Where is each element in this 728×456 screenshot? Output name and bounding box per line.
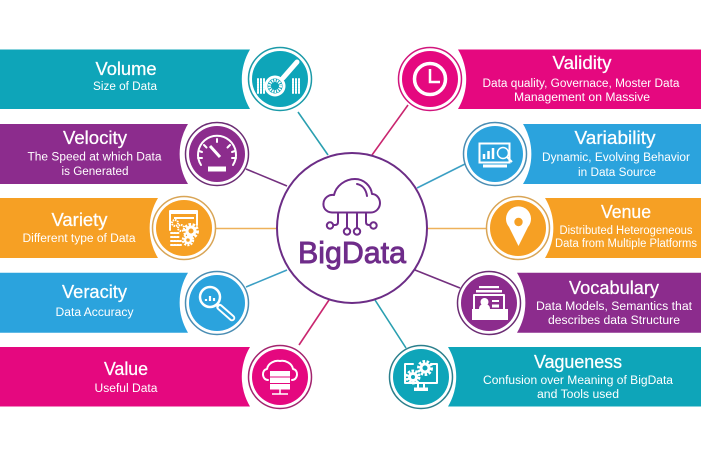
description: Dynamic, Evolving Behavior — [542, 152, 690, 164]
icon: cloud circuit — [323, 179, 380, 235]
connector: Vagueness — [375, 300, 406, 348]
heading: Venue — [601, 202, 651, 222]
icon: monitor with chart — [464, 122, 526, 186]
heading: Volume — [96, 59, 156, 79]
icon: magnifier over data — [248, 48, 312, 110]
connector: Validity — [372, 105, 408, 155]
icon: document with gears — [152, 196, 216, 260]
connector: Vocabulary — [415, 270, 460, 288]
connector: Velocity — [246, 169, 287, 186]
description line 2: Data from Multiple Platforms — [555, 238, 697, 250]
heading: Velocity — [63, 128, 127, 148]
description: Useful Data — [94, 383, 158, 395]
connector: Volume — [298, 112, 328, 155]
description: The Speed at which Data — [28, 152, 162, 164]
connector: Variability — [417, 164, 465, 188]
panel: Volume — [0, 48, 312, 110]
heading: Variability — [574, 128, 656, 148]
description line 2: in Data Source — [578, 167, 656, 179]
description: Confusion over Meaning of BigData — [483, 375, 674, 387]
panel: Variety — [0, 196, 216, 260]
connector: Veracity — [246, 270, 287, 287]
icon: magnifier with chart — [186, 272, 248, 334]
description: Data quality, Governace, Moster Data — [482, 78, 680, 90]
panel: Vagueness — [390, 346, 701, 408]
description: Data Models, Semantics that — [536, 301, 693, 313]
description: Different type of Data — [22, 233, 136, 245]
description line 2: Management on Massive — [514, 92, 650, 104]
heading: Vagueness — [534, 352, 622, 372]
heading: Vocabulary — [569, 278, 659, 298]
icon: map pin — [486, 196, 550, 260]
panel: Variability — [464, 122, 701, 186]
description: Size of Data — [93, 81, 158, 93]
panel: Value — [0, 346, 312, 408]
description: Distributed Heterogeneous — [560, 225, 693, 237]
icon: card file box — [458, 272, 520, 334]
icon: cloud server — [248, 346, 312, 408]
panel: Vocabulary — [458, 272, 701, 334]
heading: Variety — [52, 210, 108, 230]
panel: Velocity — [0, 122, 248, 186]
icon: speedometer — [186, 122, 248, 186]
icon: clock — [398, 48, 462, 110]
center hub — [277, 153, 427, 303]
panel: Validity — [398, 48, 701, 110]
connector: Venue — [427, 228, 487, 230]
hub title: BigData — [298, 235, 407, 270]
icon: monitor with gears — [390, 346, 452, 408]
heading: Value — [104, 359, 148, 379]
connector: Variety — [216, 228, 277, 230]
description line 2: and Tools used — [537, 389, 619, 401]
panel: Venue — [486, 196, 701, 260]
description line 2: is Generated — [62, 166, 128, 178]
connector: Value — [299, 300, 329, 345]
description line 2: describes data Structure — [548, 315, 680, 327]
panel: Veracity — [0, 272, 248, 334]
heading: Validity — [552, 53, 612, 73]
heading: Veracity — [62, 282, 127, 302]
description: Data Accuracy — [56, 307, 134, 319]
